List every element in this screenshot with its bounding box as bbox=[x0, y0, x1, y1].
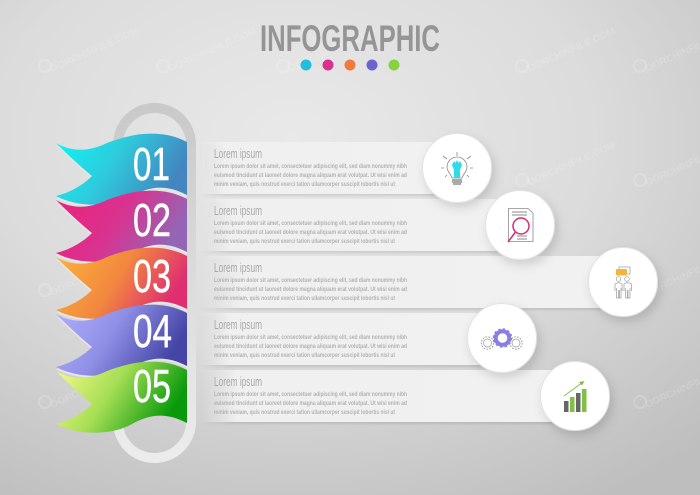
circle 5: growth chart bbox=[540, 362, 610, 430]
circle 2: document search bbox=[486, 190, 554, 260]
panel 4 body text: minim veniam, quis nostrud exerci tation ullamcorper suscipit lobortis nisl ut bbox=[214, 352, 396, 359]
watermarks: OORCHINFILE.COM bbox=[49, 250, 140, 299]
panel 3 body text bbox=[214, 277, 407, 302]
panel 1 bbox=[200, 142, 450, 194]
ring behind flags bbox=[118, 108, 191, 458]
panel 5 heading: Lorem ipsum bbox=[214, 375, 262, 389]
panel 3 body text: Lorem ipsum dolor sit amet, consectetuer adipiscing elit, sed diam nonummy nibh bbox=[214, 277, 407, 284]
panel 2 heading: Lorem ipsum bbox=[214, 204, 262, 218]
circle 3: people talking bbox=[588, 248, 658, 316]
panel 4 body text bbox=[214, 334, 407, 359]
flag 4 bbox=[56, 305, 187, 378]
panel 5 body text bbox=[214, 391, 407, 416]
panel 4 bbox=[200, 313, 500, 365]
flag 5 bbox=[56, 360, 187, 433]
panel 4 body text: Lorem ipsum dolor sit amet, consectetuer adipiscing elit, sed diam nonummy nibh bbox=[214, 334, 407, 341]
panel 4 heading: Lorem ipsum bbox=[214, 318, 262, 332]
title color dots bbox=[300, 60, 400, 70]
panel 4 body text: euismod tincidunt ut laoreet dolore magna aliquam erat volutpat. Ut wisi enim ad bbox=[214, 343, 407, 350]
panel 3 bbox=[200, 256, 620, 308]
number 05: 05 bbox=[133, 360, 171, 412]
number 03: 03 bbox=[133, 250, 171, 302]
panel 1 body text: Lorem ipsum dolor sit amet, consectetuer adipiscing elit, sed diam nonummy nibh bbox=[214, 163, 407, 170]
icon: light bulb bbox=[441, 152, 473, 184]
panel 2 body text bbox=[214, 220, 407, 245]
flag 3 bbox=[56, 248, 187, 321]
watermarks: OORCHINFILE.COM bbox=[49, 26, 140, 75]
panel 2 body text: Lorem ipsum dolor sit amet, consectetuer adipiscing elit, sed diam nonummy nibh bbox=[214, 220, 407, 227]
watermarks: OORCHINFILE.COM bbox=[287, 26, 378, 75]
number 04: 04 bbox=[133, 305, 172, 357]
panel 1 body text bbox=[214, 163, 407, 188]
icon: bar chart with arrow bbox=[564, 381, 586, 412]
watermarks: OORCHINFILE.COM bbox=[526, 140, 617, 189]
flag 2 bbox=[56, 191, 187, 264]
circle 1: idea bbox=[422, 134, 492, 202]
panel 5 body text: euismod tincidunt ut laoreet dolore magna aliquam erat volutpat. Ut wisi enim ad bbox=[214, 400, 407, 407]
number 02: 02 bbox=[133, 194, 171, 246]
panel 2 body text: minim veniam, quis nostrud exerci tation ullamcorper suscipit lobortis nisl ut bbox=[214, 238, 396, 245]
watermarks: OORCHINFILE.COM bbox=[49, 362, 140, 411]
number 01: 01 bbox=[133, 138, 170, 190]
icon: gears bbox=[481, 328, 522, 349]
circle 4: gears bbox=[468, 304, 536, 372]
watermarks: OORCHINFILE.COM bbox=[526, 26, 617, 75]
panel 3 heading: Lorem ipsum bbox=[214, 261, 262, 275]
icon: two people with speech bubble bbox=[615, 267, 632, 298]
panel 3 body text: euismod tincidunt ut laoreet dolore magna aliquam erat volutpat. Ut wisi enim ad bbox=[214, 286, 407, 293]
panel 1 heading: Lorem ipsum bbox=[214, 147, 262, 161]
panel 2 bbox=[200, 199, 520, 251]
panel 2 body text: euismod tincidunt ut laoreet dolore magna aliquam erat volutpat. Ut wisi enim ad bbox=[214, 229, 407, 236]
watermarks: OORCHINFILE.COM bbox=[167, 26, 258, 75]
flag 1 bbox=[56, 134, 187, 207]
panel 3 body text: minim veniam, quis nostrud exerci tation ullamcorper suscipit lobortis nisl ut bbox=[214, 295, 396, 302]
panel 5 body text: minim veniam, quis nostrud exerci tation ullamcorper suscipit lobortis nisl ut bbox=[214, 409, 396, 416]
watermarks bbox=[39, 26, 700, 411]
title: INFOGRAPHIC bbox=[260, 18, 440, 59]
panel 5 bbox=[200, 370, 570, 422]
panel 1 body text: euismod tincidunt ut laoreet dolore magna aliquam erat volutpat. Ut wisi enim ad bbox=[214, 172, 407, 179]
icon: document with magnifier bbox=[508, 208, 533, 242]
panel 1 body text: minim veniam, quis nostrud exerci tation ullamcorper suscipit lobortis nisl ut bbox=[214, 181, 396, 188]
panel 5 body text: Lorem ipsum dolor sit amet, consectetuer adipiscing elit, sed diam nonummy nibh bbox=[214, 391, 407, 398]
